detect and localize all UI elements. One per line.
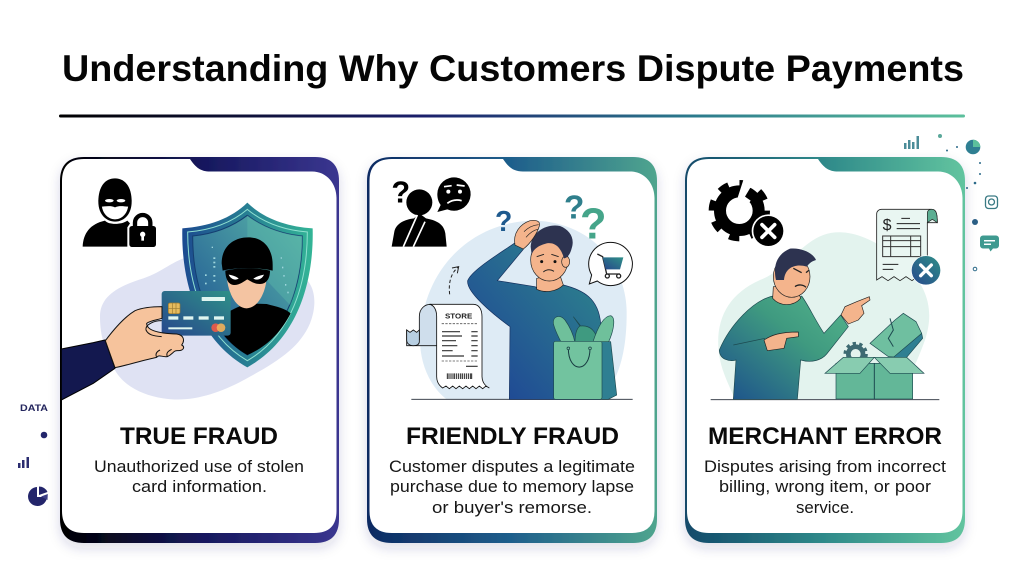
figure: masked thief	[220, 237, 291, 355]
figure: shopper	[468, 220, 601, 399]
panel: friendly fraud	[367, 157, 657, 543]
receipt with error mark: $	[883, 217, 892, 234]
figure: hand and sleeve	[61, 307, 184, 400]
question marks: ?	[580, 200, 606, 248]
icon: thief with padlock	[83, 178, 156, 247]
dashed arrow	[449, 267, 459, 294]
ground line	[411, 399, 633, 400]
background blob	[100, 257, 314, 400]
title: Understanding Why Customers Dispute Payments	[62, 48, 964, 89]
description: true fraud: Unauthorized use of stolen	[94, 457, 304, 476]
shopping bag with groceries	[553, 316, 617, 399]
background blob	[420, 221, 627, 399]
card interior: merchant error	[687, 159, 962, 533]
heading: friendly fraud: FRIENDLY FRAUD	[406, 423, 619, 450]
right decoration: social and data icons	[904, 134, 999, 271]
icon: person with question and speech bubble	[391, 176, 471, 247]
icon: person with question and speech bubble: ?	[391, 176, 410, 210]
description: friendly fraud: Customer disputes a legitimate	[389, 457, 635, 476]
question marks: ?	[495, 206, 512, 238]
description: merchant error: billing, wrong item, or poor	[719, 477, 931, 496]
description: friendly fraud	[389, 457, 635, 517]
question marks: ?	[564, 189, 584, 226]
description: true fraud: card information.	[132, 477, 267, 496]
illustration: angry customer	[711, 180, 941, 400]
heading: true fraud: TRUE FRAUD	[120, 423, 278, 450]
description: merchant error: service.	[796, 498, 854, 517]
description: friendly fraud: purchase due to memory lapse	[390, 477, 634, 496]
heading: merchant error: MERCHANT ERROR	[708, 423, 942, 450]
card interior: friendly fraud	[370, 159, 654, 533]
receipt	[407, 304, 489, 389]
receipt with error mark	[877, 209, 941, 285]
illustration: confused shopper	[391, 176, 633, 400]
left decoration: data icons	[18, 403, 48, 506]
description: friendly fraud: or buyer's remorse.	[432, 498, 592, 517]
illustration: thief and card	[61, 178, 314, 400]
description: merchant error: Disputes arising from incorrect	[704, 457, 946, 476]
card frame: friendly fraud	[367, 157, 657, 543]
title underline	[59, 114, 965, 118]
icon: cart speech bubble	[589, 242, 632, 286]
icon: credit card	[162, 291, 231, 336]
card interior: true fraud	[62, 159, 336, 533]
question marks	[495, 189, 606, 248]
card frame: merchant error	[685, 157, 965, 543]
description: merchant error	[704, 457, 946, 517]
description: true fraud	[94, 457, 304, 496]
left decoration: data icons: DATA	[20, 403, 48, 414]
figure: pointing customer	[719, 248, 870, 399]
open box with broken product	[825, 313, 924, 399]
icon: broken gear with x	[713, 180, 785, 248]
card frame: true fraud	[60, 157, 339, 543]
ground line	[711, 399, 939, 400]
background blob	[718, 232, 929, 399]
icon: shield	[182, 203, 313, 367]
panel: merchant error	[685, 157, 965, 543]
panel: true fraud	[60, 157, 339, 543]
receipt: STORE	[445, 312, 472, 321]
